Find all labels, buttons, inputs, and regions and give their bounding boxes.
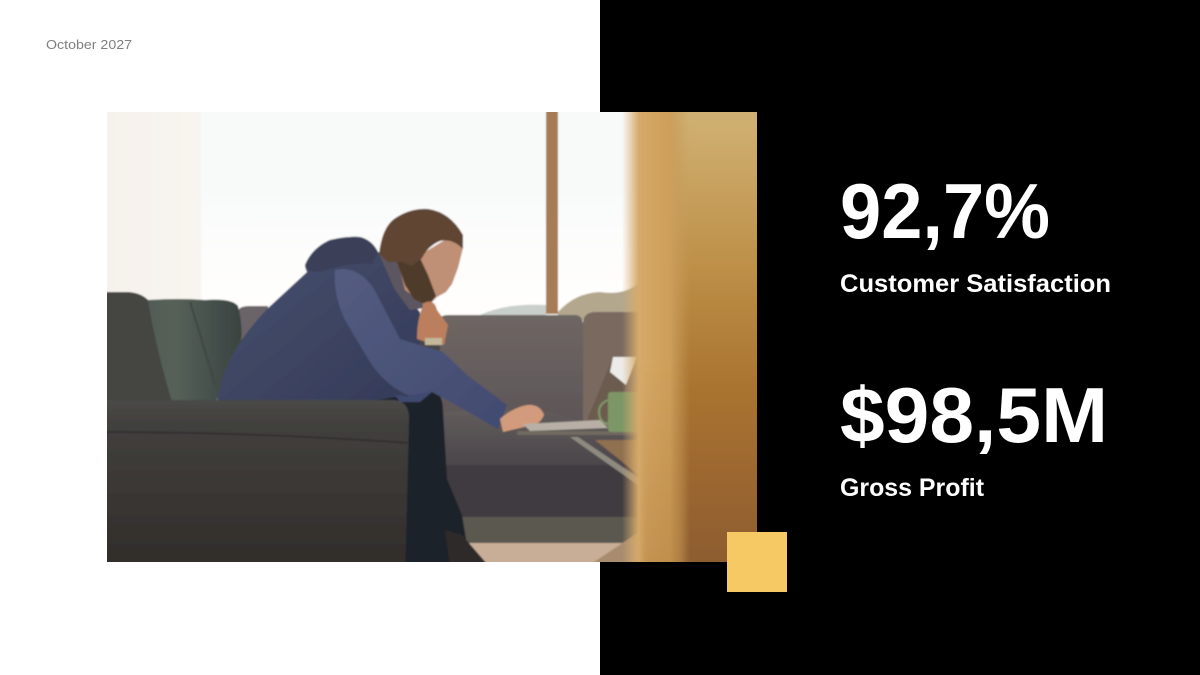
hand on chin bbox=[417, 302, 448, 345]
value: $98,5M: $98,5M bbox=[840, 371, 1108, 459]
neck and head bbox=[378, 252, 425, 310]
label: gross profit: Gross Profit bbox=[840, 474, 985, 502]
hoodie body bbox=[217, 237, 420, 405]
blurred foreground post bbox=[623, 112, 757, 562]
wall and window bbox=[107, 112, 638, 322]
man bbox=[205, 209, 544, 575]
photo: man working on a laptop on a sofa bbox=[95, 100, 770, 580]
white background panel bbox=[0, 0, 600, 675]
hand on laptop bbox=[500, 405, 544, 432]
stat: gross profit bbox=[840, 371, 1108, 502]
forearm over sofa edge bbox=[395, 392, 432, 402]
near sofa backrest bbox=[130, 292, 242, 401]
stat: customer satisfaction bbox=[840, 167, 1111, 298]
legs bbox=[378, 392, 466, 562]
black background panel bbox=[600, 0, 1200, 675]
near sofa arm shading bbox=[107, 399, 408, 562]
date label: October 2027 bbox=[46, 37, 132, 52]
near sofa arm bbox=[205, 401, 409, 575]
table and laptop bbox=[517, 357, 647, 568]
label: customer satisfaction: Customer Satisfaction bbox=[840, 270, 1111, 298]
far sofa section bbox=[238, 306, 655, 568]
yellow accent square bbox=[727, 532, 787, 592]
arm bbox=[335, 269, 507, 429]
value: 92,7%: 92,7% bbox=[840, 167, 1050, 255]
